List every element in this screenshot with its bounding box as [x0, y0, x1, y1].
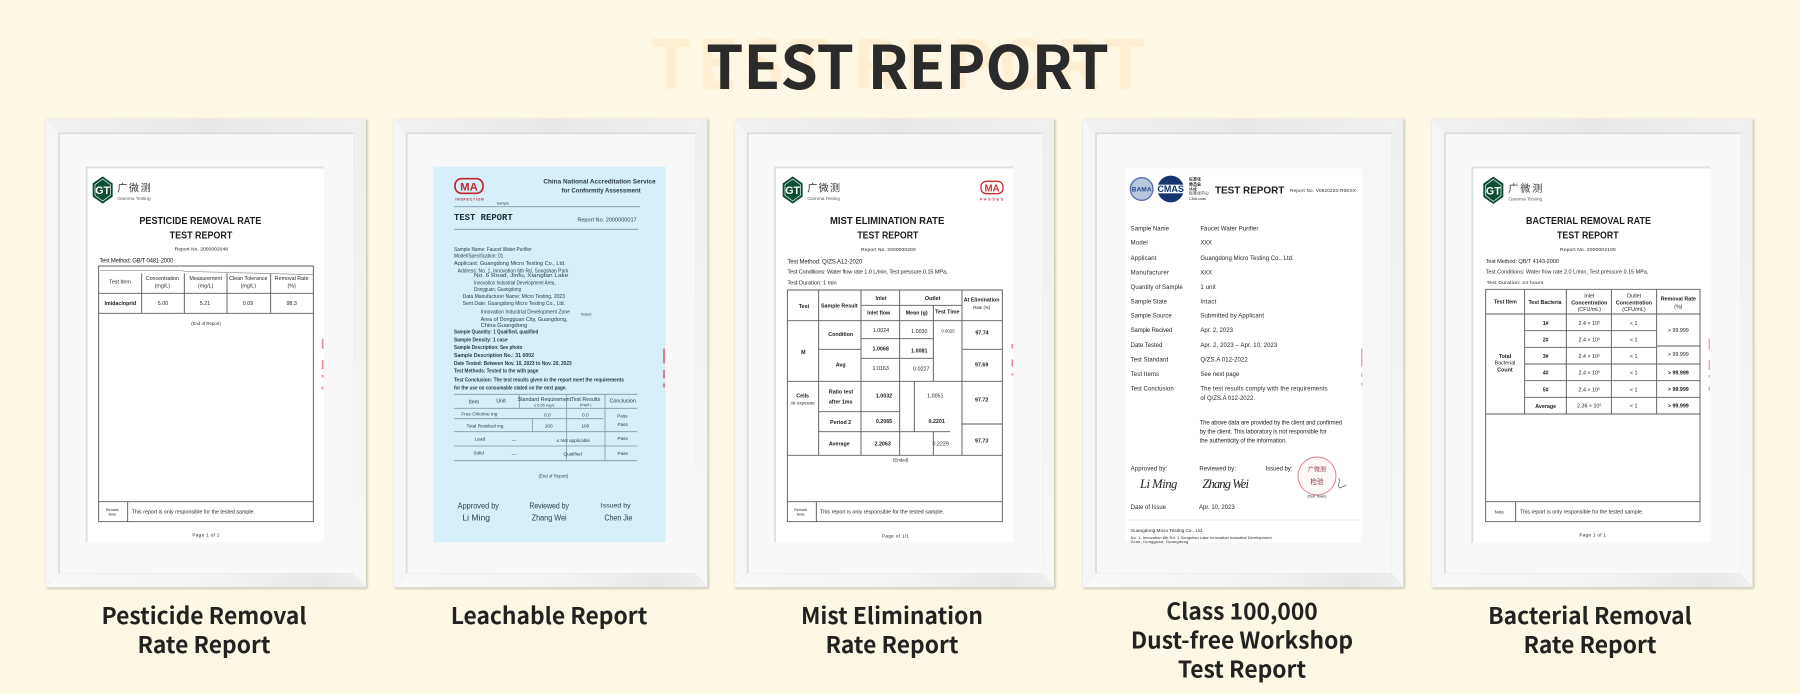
signatures: Reviewed by [529, 501, 569, 510]
data table: after 1ms [829, 399, 853, 405]
data table: Count [1497, 368, 1513, 374]
report heading: BACTERIAL REMOVAL RATE [1526, 216, 1652, 227]
report heading: Test Duration: 1 min [787, 281, 837, 287]
sample details: XXX [1200, 241, 1212, 247]
picture frame [735, 118, 1055, 589]
data table: Concentration [1616, 300, 1652, 306]
caption: dust-free workshop test report: Class 100,000 [1166, 594, 1318, 626]
data table: Bacterial [1495, 361, 1515, 367]
report heading: TEST REPORT [1557, 231, 1619, 242]
caption: bacterial removal rate report: Rate Report [1524, 627, 1657, 660]
data table: 1.0051 [927, 393, 944, 399]
sample details: Innovation Industrial Development Area, [474, 280, 556, 286]
sample details: China Guangdong [481, 323, 527, 329]
data table: Rate (%) [973, 305, 991, 310]
sample details: Sample Source [1131, 314, 1172, 320]
approvals and stamp: Reviewed by: [1199, 466, 1236, 472]
approvals and stamp: 广微测 [1308, 465, 1326, 474]
sample details: for the use on consumable stated on the next page. [454, 385, 567, 391]
caption: dust-free workshop test report: Dust-free Workshop [1131, 622, 1353, 656]
data table: Period 2 [830, 420, 851, 426]
data table: 0.0227 [913, 367, 930, 373]
data table: Note [1495, 509, 1504, 514]
data table [787, 290, 1002, 538]
report heading: Report No. 2000002100 [1560, 247, 1616, 253]
panel: class 100,000 dust-free workshop test report [1083, 118, 1405, 589]
sample details: Address: No. 1, Innovation 6th Rd, Songshan Park [458, 268, 569, 274]
stamp edge [1010, 344, 1015, 376]
data table: 0.2065 [876, 419, 892, 425]
sample details: The test results comply with the requirements [1200, 387, 1328, 393]
panel: bacterial removal rate report [1432, 118, 1754, 589]
data table: M [801, 350, 806, 356]
data table: (End of Report) [191, 321, 221, 326]
data table: At Elimination [964, 297, 1000, 303]
results table: Lead [475, 437, 486, 442]
accreditation logos and heading [1130, 176, 1357, 202]
data table: Page 1 of 1 [192, 532, 220, 537]
sample details: Quantity of Sample [1131, 285, 1183, 291]
caption: bacterial removal rate report: Bacterial Removal [1488, 598, 1692, 631]
results table: Test Results [571, 397, 601, 403]
data table: Removal Rate [275, 276, 309, 282]
accreditation logos and heading: CMA.cnas [1189, 197, 1206, 201]
data table: (mg/L) [198, 283, 214, 289]
data table: 2.4 × 10⁵ [1579, 387, 1600, 393]
report heading: Test Method: GB/T 0481-2000 [99, 259, 174, 265]
data table [1486, 289, 1700, 537]
results table: Pass [617, 451, 629, 456]
results table: 0.0 [582, 412, 589, 417]
report heading: MIST ELIMINATION RATE [830, 216, 945, 227]
results table: — [512, 438, 517, 443]
CMA logo and accreditation header: China National Accreditation Service [543, 178, 656, 185]
data table: 2.4 × 10⁵ [1579, 354, 1600, 360]
logo: 广微测 [117, 180, 151, 195]
sample details: Faucet Water Purifier [1200, 226, 1258, 232]
CMA logo and accreditation header: Sample [497, 202, 509, 206]
data table: Test Time [935, 310, 960, 316]
data table: < 1 [1630, 354, 1637, 360]
logo: Gamma Testing [117, 196, 151, 202]
approvals and stamp: Li Ming [1139, 477, 1177, 491]
results table: 0.0 [544, 412, 551, 417]
CMA logo and accreditation header: for Conformity Assessment [562, 188, 641, 195]
caption: mist elimination rate report: Rate Report [826, 627, 959, 660]
data table: 1# [1543, 321, 1549, 327]
logos: GT [785, 185, 801, 197]
data table: Page of 1/1 [882, 533, 909, 538]
sample details: Submitted by Applicant [1200, 314, 1264, 320]
picture frame [46, 118, 367, 589]
data table: > 99.999 [1668, 404, 1689, 410]
data table: < 1 [1630, 321, 1637, 327]
data table: (CFU/mL) [1622, 307, 1646, 313]
data table: 1.0024 [873, 328, 889, 334]
data table: (%) [288, 283, 296, 289]
report heading: TEST REPORT [857, 231, 918, 242]
title: TEST REPORT [650, 10, 1146, 109]
data table: 0.2201 [929, 419, 945, 425]
data table: 97.69 [975, 363, 988, 369]
sample details: XXX [1200, 270, 1212, 276]
data table: This report is only responsible for the tested sample. [820, 509, 944, 515]
data table: 1.0032 [876, 393, 892, 399]
data table: Note [797, 513, 805, 517]
data table: < 1 [1630, 387, 1637, 393]
signatures: Li Ming [462, 514, 490, 523]
sample details [1131, 226, 1342, 444]
sample details: Guangdong Micro Testing Co., Ltd. [1200, 256, 1294, 262]
sample details: See next page [1200, 372, 1240, 378]
approvals and stamp: Issued by: [1266, 466, 1293, 472]
report heading: Test Conditions: Water flow rate 2.0 L/min, Test pressure 0.15 MPa, [1486, 270, 1648, 276]
report document [454, 178, 664, 523]
data table: 0.0025 [941, 329, 955, 334]
results table: Standard Requirement [518, 397, 572, 403]
results table: Solid [473, 451, 484, 456]
data table: 2.4 × 10⁵ [1579, 337, 1600, 343]
data table: 5.00 [158, 301, 168, 307]
data table: Concentration [146, 276, 179, 282]
CMA logo and accreditation header: MA [460, 181, 478, 193]
approvals and stamp: Zhang Wei [1202, 477, 1249, 491]
sample details: Test Standard [1131, 358, 1168, 364]
data table: Sample Result [821, 304, 858, 310]
data table [99, 266, 313, 537]
data table: Mean (g) [906, 310, 928, 316]
approvals and stamp: (Test Team) [1307, 495, 1327, 499]
data table: Outlet [1627, 293, 1642, 299]
sample details: Date Tested: Between Nov. 10, 2023 to Nov. 20, 2023 [454, 361, 572, 367]
accreditation logos and heading: 标准化中心 [1189, 190, 1209, 196]
data table: 5# [1543, 387, 1549, 393]
data table: < 1 [1630, 404, 1637, 410]
sample details: Date Tested [1131, 343, 1162, 349]
approvals and stamp: Approved by: [1131, 466, 1168, 472]
data table: Removal Rate [1661, 297, 1696, 303]
data table: 97.72 [975, 397, 988, 403]
sample details: Innovation Industrial Development Zone [481, 310, 570, 316]
logos: MA [984, 184, 1000, 195]
footer address: Zone, Dongguan, Guangdong [1131, 539, 1188, 544]
sample details: Tested [581, 312, 591, 316]
sample details [454, 247, 624, 391]
results table: Pass [617, 436, 629, 441]
logos [783, 176, 1004, 204]
results table: — [512, 451, 517, 456]
sample details: 1 unit [1200, 285, 1216, 291]
sample details: Apr. 2, 2023 [1200, 328, 1234, 334]
data table: This report is only responsible for the tested sample. [132, 509, 255, 515]
picture frame [1083, 118, 1405, 589]
data table: 0.09 [243, 301, 253, 307]
sample details: Test Conclusion [1131, 387, 1174, 393]
results table: Total Residual mg [466, 423, 504, 428]
accreditation logos and heading: BAMA [1132, 186, 1152, 193]
sample details: Sample Name [1131, 226, 1170, 232]
approvals and stamp [1131, 457, 1346, 511]
signatures [458, 501, 633, 523]
report document [1483, 177, 1709, 537]
stamp edge [1707, 339, 1711, 391]
results table: Pass [617, 422, 629, 427]
stamp edge [661, 349, 667, 387]
sample details: Sample Recived [1131, 328, 1172, 334]
data table: 97.74 [975, 331, 989, 337]
sample details: Data Manufacturer Name: Micro Testing, 2023 [463, 294, 565, 300]
report heading: PESTICIDE REMOVAL RATE [139, 216, 262, 227]
data table: Outlet [925, 296, 941, 302]
report heading: Test Method: QB/T 4143-2000 [1486, 259, 1559, 265]
sample details: Sample Name: Faucet Water Purifier [454, 247, 532, 253]
signatures: Issued by [601, 503, 631, 510]
sample details: Q/ZS.A 012-2022 [1200, 358, 1248, 364]
sample details: Test Conclusion: The test results given in the report meet the requirements [454, 377, 624, 383]
results table: Qualified [563, 452, 582, 457]
footer address: Guangdong Micro Testing Co., Ltd. [1131, 528, 1203, 533]
sample details: Sent Date: Guangdong Micro Testing Co., Ltd. [463, 301, 565, 307]
data table: Test Bacteria [1528, 300, 1562, 306]
accreditation logos and heading: Report No. V0920220-R0EXX [1290, 188, 1357, 193]
data table: (Ended) [893, 457, 909, 462]
data table: > 99.999 [1668, 328, 1689, 334]
approvals and stamp: Apr. 10, 2023 [1199, 505, 1235, 511]
picture frame [1432, 118, 1754, 589]
CMA logo and accreditation header: Report No. 2000000017 [577, 218, 637, 224]
results table: (mg/L) [580, 402, 592, 407]
data table: Test Item [1494, 300, 1517, 306]
caption: leachable report: Leachable Report [451, 598, 648, 631]
results table: Free Chlorine mg [461, 412, 498, 417]
picture frame [394, 118, 709, 589]
sample details: Test Items [1131, 372, 1159, 378]
results table: 100 [545, 424, 553, 429]
report document [1127, 176, 1362, 544]
data table: Remark [794, 508, 807, 512]
data table: 3# [1543, 354, 1549, 360]
data table: Average [829, 442, 850, 448]
panel: mist elimination rate report [735, 118, 1055, 589]
logo: Gamma Testing [1508, 196, 1543, 202]
panel: leachable report [394, 118, 709, 589]
sample details: Intact [1200, 299, 1217, 305]
CMA logo and accreditation header: INSPECTION [455, 198, 484, 202]
caption: mist elimination rate report: Mist Elimination [801, 598, 983, 631]
data table: Test [799, 304, 810, 310]
data table: Inlet [876, 296, 887, 302]
sample details: Model [1131, 241, 1148, 247]
data table: Remark [106, 508, 119, 512]
data table: Air exposure [791, 401, 815, 406]
caption: pesticide removal rate report: Rate Report [138, 627, 271, 660]
report heading [787, 216, 948, 287]
report heading: Test Method: Q/ZS A12-2020 [787, 259, 863, 265]
data table: < 1 [1630, 371, 1637, 377]
data table: 2# [1543, 337, 1549, 343]
sample details: Sample Description No.: 31 0002 [454, 353, 534, 359]
data table: This report is only responsible for the tested sample. [1520, 509, 1643, 515]
sample details: Sample Quantity: 1 Qualified, qualified [454, 330, 538, 336]
sample details: Sample Description: See photo [454, 345, 523, 351]
data table: 5.21 [200, 301, 210, 307]
approvals and stamp: Date of Issue [1131, 505, 1167, 511]
results table: Unit [496, 399, 506, 405]
approvals and stamp: 检验 [1310, 476, 1324, 486]
stamp edge [1360, 349, 1364, 385]
data table: 1.0068 [873, 347, 889, 353]
data table: Imidacloprid [104, 301, 136, 307]
report heading [1486, 216, 1652, 286]
results table [454, 394, 637, 479]
report document [93, 176, 323, 537]
data table: 1.0163 [873, 366, 889, 372]
data table: 2.36 × 10⁵ [1577, 404, 1602, 410]
accreditation logos and heading: 委员会 [1189, 180, 1201, 186]
sample details: Manufacturer [1131, 270, 1169, 276]
accreditation logos and heading: TEST REPORT [1215, 185, 1285, 196]
accreditation logos and heading: 认证 [1189, 185, 1197, 191]
sample details: Applicant: Guangdong Micro Testing Co., Ltd. [454, 261, 566, 267]
sample details: Apr. 2, 2023 – Apr. 10, 2023 [1200, 343, 1278, 349]
data table: 97.73 [975, 439, 988, 445]
sample details: the authenticity of the information. [1200, 438, 1287, 444]
panel: pesticide removal rate report [46, 118, 367, 589]
data table: 0.2229 [933, 442, 949, 448]
logos: Gamma Testing [807, 196, 840, 202]
data table: 1.0081 [911, 349, 928, 355]
signatures: Zhang Wei [532, 514, 567, 523]
CMA logo and accreditation header [454, 178, 656, 229]
sample details: No. 6 Road, Jinfu, Xiangtan Lake [474, 273, 568, 279]
results table: ≤ Not applicable [557, 438, 590, 443]
caption: dust-free workshop test report: Test Report [1178, 652, 1306, 684]
data table: (mg/L) [241, 283, 256, 289]
results table: Conclusion [609, 398, 636, 404]
caption: pesticide removal rate report: Pesticide Removal [101, 598, 307, 631]
results table: (End of Report) [539, 474, 569, 479]
logo: GT [1486, 185, 1501, 197]
report heading: TEST REPORT [170, 230, 232, 241]
data table: Test Item [109, 279, 131, 285]
report heading [99, 216, 262, 265]
logos: 广微测 [807, 180, 840, 195]
report heading: Report No. 2000002048 [175, 247, 228, 253]
data table: > 99.999 [1668, 370, 1689, 376]
data table: Clean Tolerance [229, 276, 268, 282]
accreditation logos and heading: 标准化 [1189, 176, 1201, 182]
data table: > 99.999 [1668, 352, 1689, 358]
sample details: The above data are provided by the client and confirmed [1200, 421, 1342, 427]
logo [1483, 177, 1543, 204]
CMA logo and accreditation header: TEST REPORT [454, 212, 513, 223]
data table: 2.4 × 10⁵ [1579, 371, 1600, 377]
data table: Condition [828, 332, 853, 338]
footer address: No. 1, Innovation 6th Rd. 1 Songshan Lake Innovation Industrial Development [1131, 535, 1273, 540]
logo: GT [95, 185, 111, 197]
logo [93, 176, 151, 204]
report heading: Report No. 2000000200 [861, 247, 916, 253]
data table: 2.2063 [875, 441, 891, 447]
sample details: Dongguan, Guangdong [474, 287, 521, 293]
data table: 2.4 × 10⁵ [1579, 321, 1600, 327]
logos: PASSED [980, 197, 1004, 201]
data table: Cells [796, 393, 809, 399]
sample details: by the client. This laboratory is not responsible for [1200, 430, 1327, 436]
results table: Item [469, 399, 480, 405]
results table: 100 [581, 424, 590, 429]
data table: Total [1499, 354, 1512, 360]
signatures: Chen Jie [604, 513, 633, 522]
accreditation logos and heading: CMAS [1157, 184, 1184, 194]
report heading: Test Duration: 24 hours [1487, 280, 1544, 286]
title: TEST REPORT [706, 20, 1109, 107]
report document [783, 176, 1012, 538]
report heading: Test Conditions: Water flow rate 1.0 L/min, Test pressure 0.15 MPa, [787, 270, 948, 276]
data table: Inlet [1584, 293, 1595, 299]
data table: Concentration [1571, 300, 1607, 306]
results table: Pass [617, 413, 628, 418]
data table: 4# [1543, 371, 1549, 377]
sample details: Sample State [1131, 299, 1168, 305]
results table: ≤ 0.05 mg/L [534, 403, 556, 408]
data table: (%) [1674, 304, 1683, 310]
data table: (CFU/mL) [1578, 307, 1601, 313]
data table: (mg/L) [155, 283, 170, 289]
data table: Note [108, 513, 116, 517]
data table: 1.0030 [911, 329, 928, 335]
data table: Inlet flow [867, 310, 891, 316]
data table: Avg [836, 363, 846, 369]
data table: Ratio test [829, 390, 853, 396]
signatures: Approved by [458, 501, 499, 510]
sample details: of Q/ZS.A 012-2022. [1200, 396, 1255, 402]
sample details: Area of Dongguan City, Guangdong, [481, 317, 568, 323]
data table: Page 1 of 1 [1579, 532, 1606, 537]
sample details: Model/Specification: 01 [454, 254, 503, 260]
data table: Measurement [189, 276, 222, 282]
stamp edge [320, 339, 325, 389]
sample details: Applicant [1131, 256, 1157, 262]
data table: 98.3 [286, 301, 297, 307]
data table: Average [1535, 404, 1556, 410]
data table: > 99.999 [1668, 387, 1689, 393]
data table: < 1 [1630, 337, 1637, 343]
logo: 广微测 [1508, 180, 1542, 195]
sample details: Sample Density: 1 case [454, 338, 508, 344]
sample details: Test Methods: Tested to the with page [454, 369, 538, 375]
footer address [1127, 520, 1360, 544]
